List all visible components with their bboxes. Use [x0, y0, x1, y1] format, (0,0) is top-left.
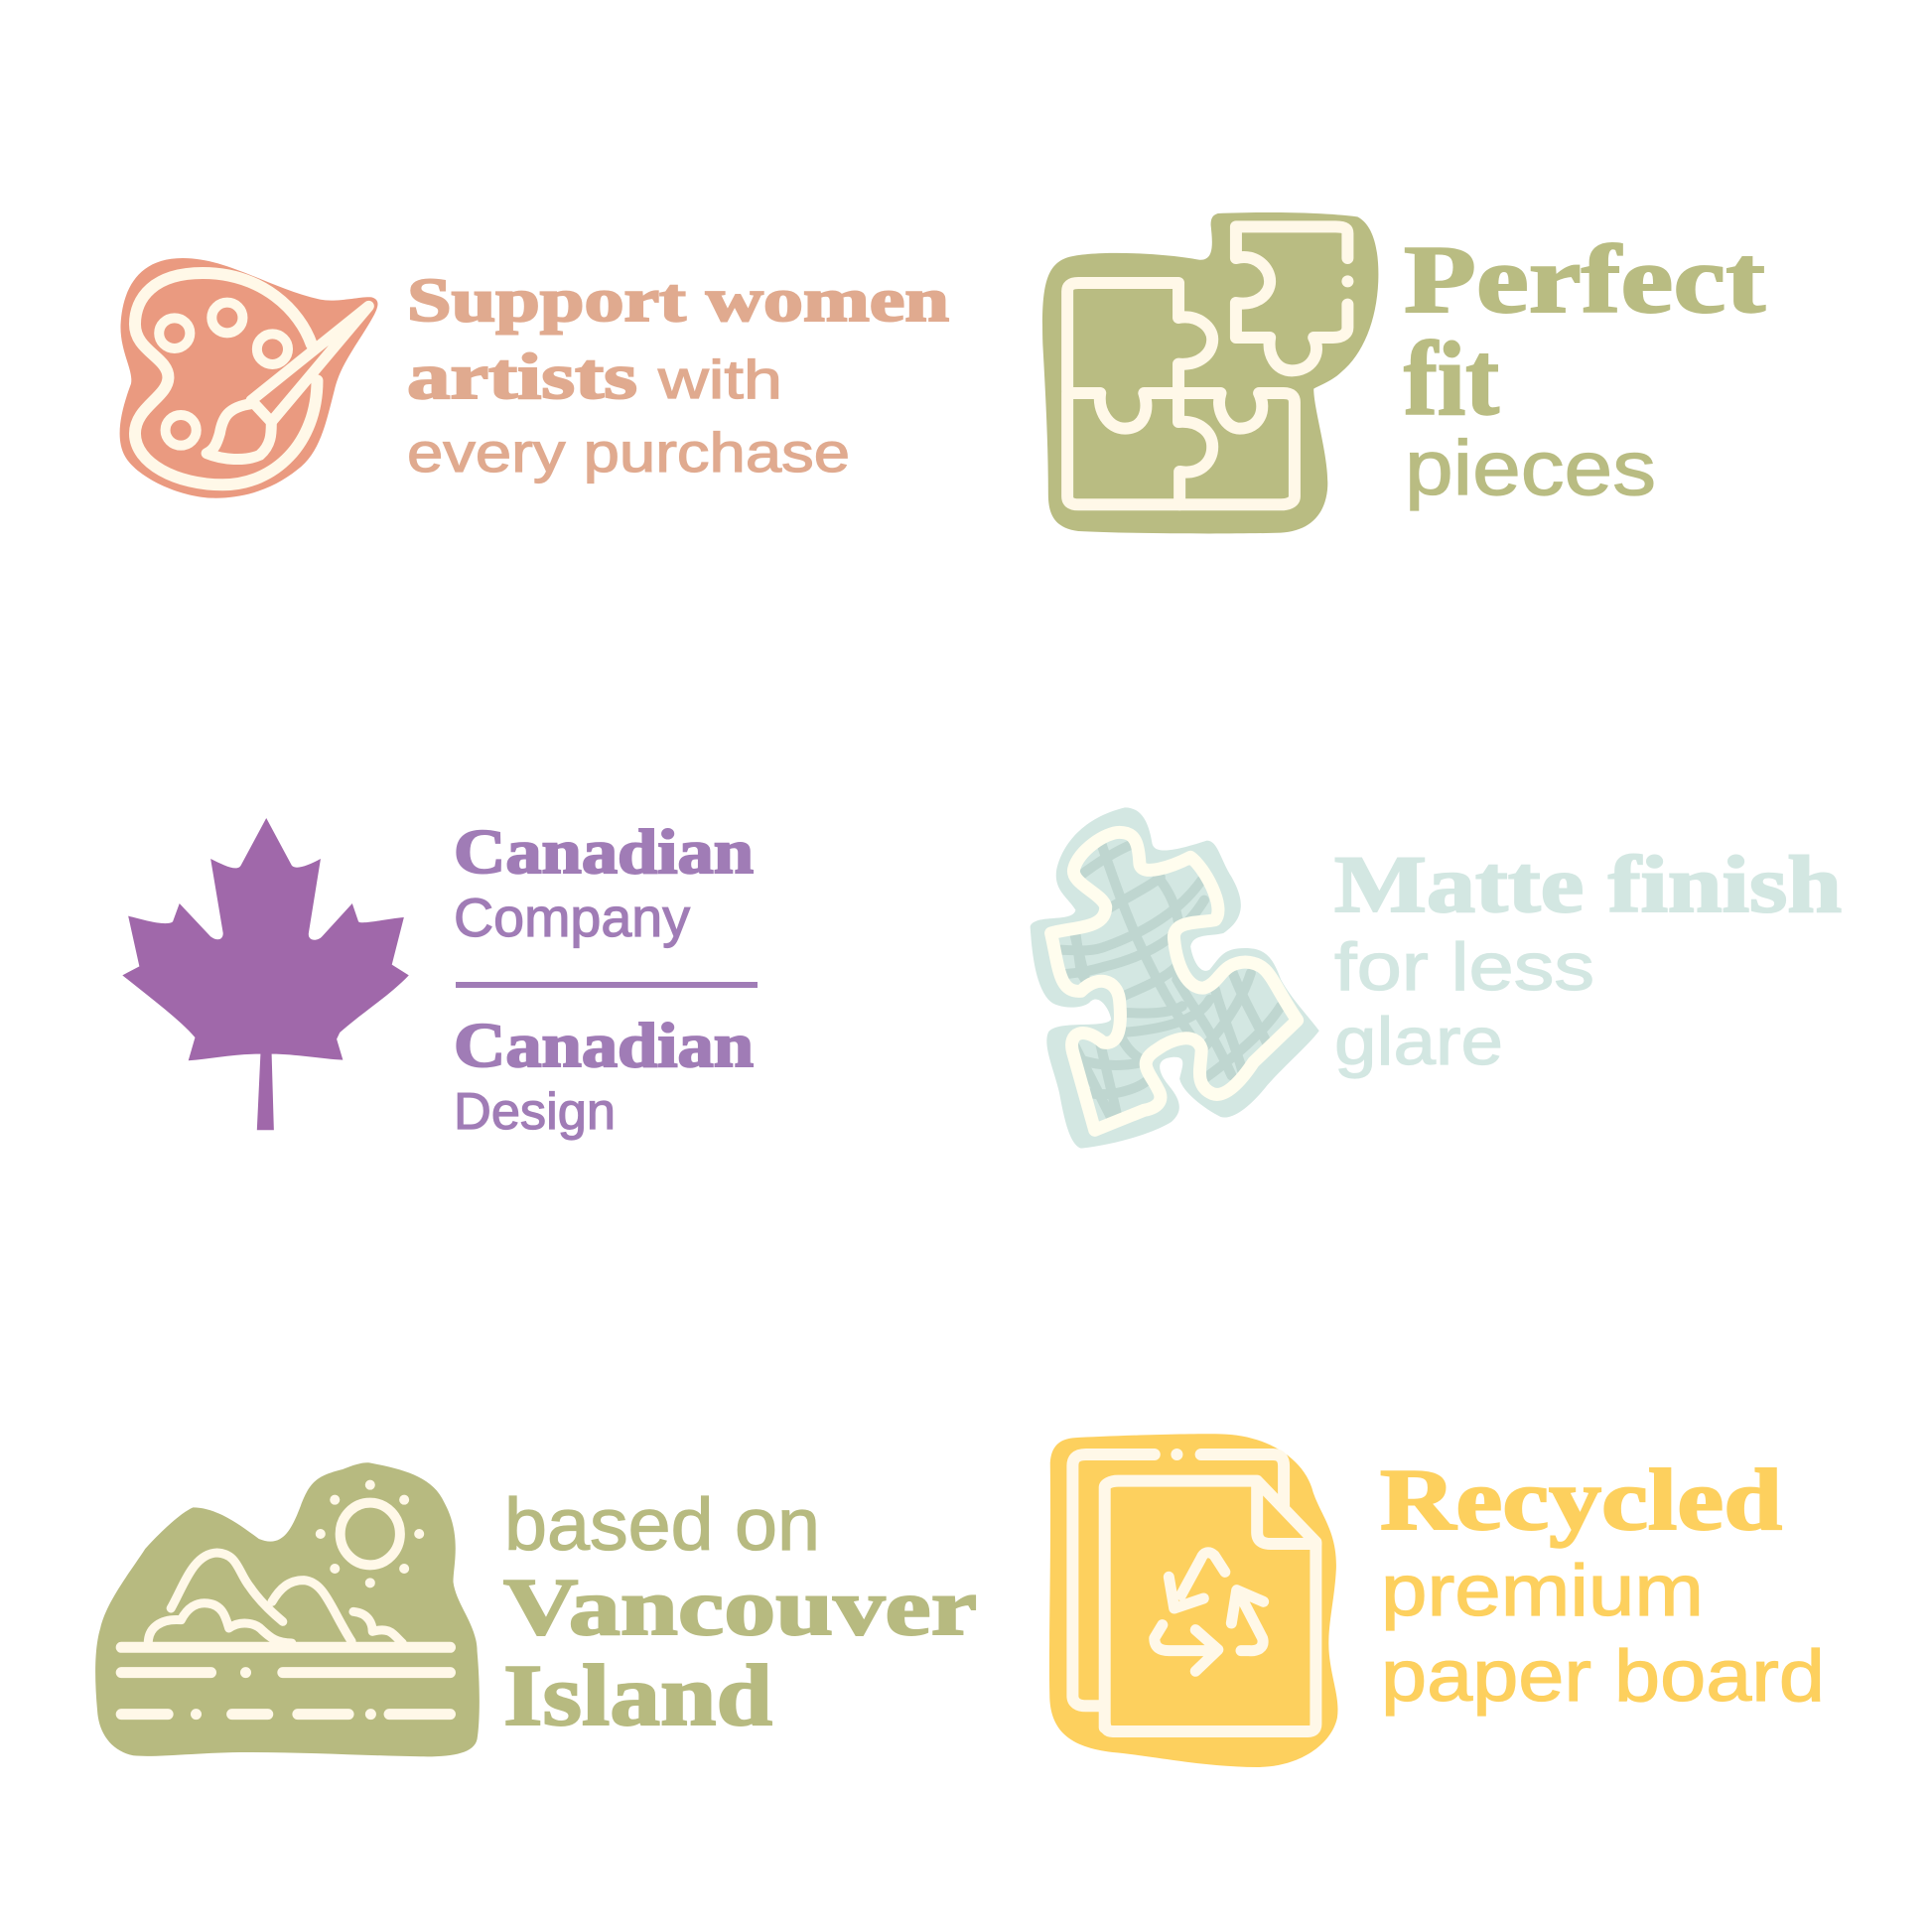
panel: support women artists: [120, 258, 949, 498]
text: support women artists with every purchase: [407, 267, 949, 483]
text: canadian company: [454, 816, 754, 948]
panel: perfect fit pieces: [1042, 212, 1765, 533]
icon: recycled paper: [1049, 1434, 1337, 1767]
text: perfect fit pieces: fit: [1404, 321, 1499, 437]
panel: matte finish: [1031, 807, 1842, 1149]
panel: canadian company and design: [122, 816, 758, 1141]
icon: island landscape: [95, 1462, 480, 1756]
text: based on vancouver island: Vancouver: [503, 1562, 977, 1652]
icon: puzzle piece with net: [1031, 807, 1319, 1149]
text: support women artists with every purchase: with: [657, 348, 782, 410]
text: based on vancouver island: [503, 1483, 977, 1744]
panel: vancouver island: [95, 1462, 977, 1756]
text: recycled premium paper board: premium: [1381, 1551, 1704, 1631]
text: perfect fit pieces: Perfect: [1404, 226, 1765, 334]
panel: recycled premium paper board: [1049, 1434, 1825, 1767]
icon: maple leaf: [122, 818, 409, 1130]
text: based on vancouver island: Island: [503, 1648, 772, 1744]
text: recycled premium paper board: paper board: [1381, 1636, 1825, 1717]
text: matte finish for less glare: glare: [1334, 1004, 1503, 1079]
text: canadian company: Canadian: [454, 816, 754, 887]
text: based on vancouver island: based on: [504, 1483, 820, 1566]
divider line: [456, 982, 758, 988]
text: matte finish for less glare: for less: [1334, 929, 1594, 1005]
text: canadian design: Design: [454, 1083, 616, 1141]
text: recycled premium paper board: [1380, 1452, 1825, 1717]
text: support women artists with every purchase: artists: [407, 341, 637, 413]
text: perfect fit pieces: pieces: [1405, 424, 1656, 511]
text: canadian company: Company: [454, 887, 691, 948]
text: matte finish for less glare: [1334, 839, 1842, 1079]
text: canadian design: Canadian: [454, 1010, 754, 1080]
text: support women artists with every purchase: every purchase: [407, 421, 850, 483]
text: support women artists with every purchase: Support women: [407, 267, 949, 335]
text: recycled premium paper board: Recycled: [1380, 1452, 1782, 1549]
text: canadian design: [454, 1010, 754, 1141]
icon: paint palette: [120, 258, 377, 498]
icon: puzzle pieces: [1042, 212, 1378, 533]
text: matte finish for less glare: Matte finish: [1334, 839, 1842, 929]
text: perfect fit pieces: [1404, 226, 1765, 511]
